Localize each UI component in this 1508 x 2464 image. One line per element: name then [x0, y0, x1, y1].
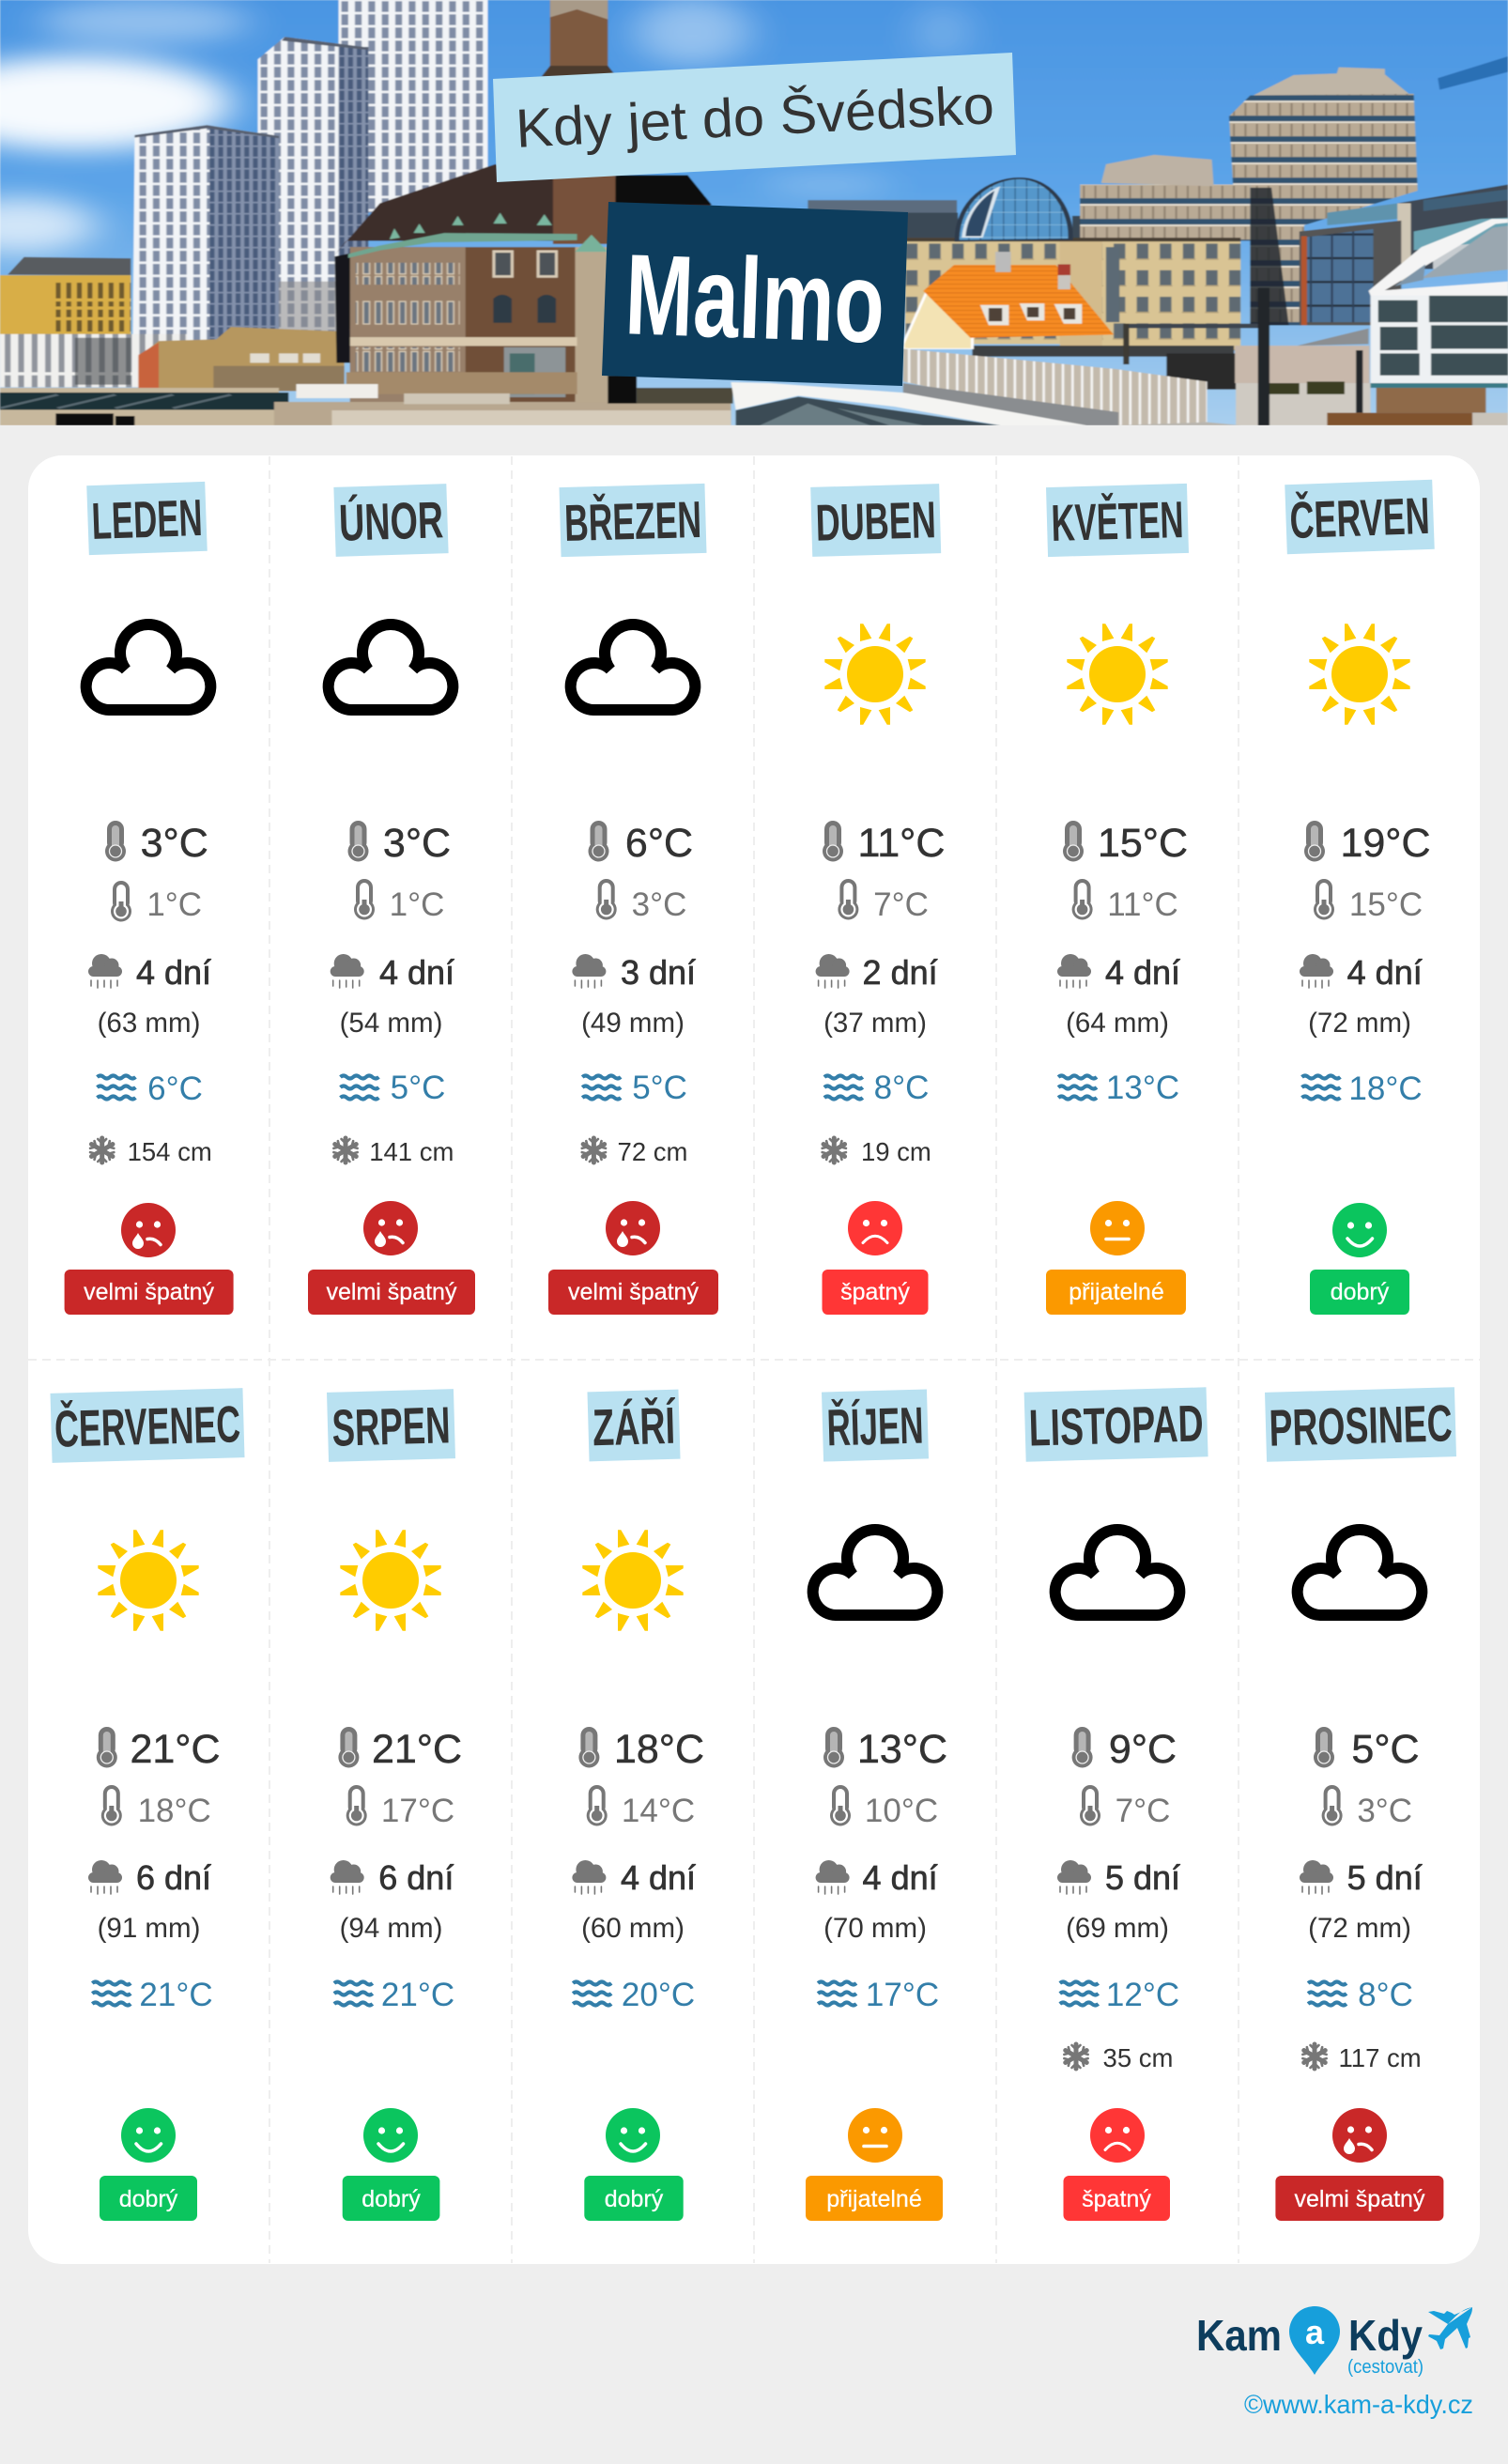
min temperature: 14°C [622, 1793, 695, 1829]
month label: Březen: BŘEZEN [563, 490, 702, 552]
rainy days [1300, 1858, 1423, 1897]
sea temperature: 21°C [381, 1977, 454, 2013]
sea temperature [1301, 1070, 1423, 1107]
month column: Březen [548, 484, 718, 1315]
month label: Srpen [327, 1389, 455, 1462]
max temperature [1072, 1727, 1177, 1772]
rainy days: 4 dní [379, 953, 454, 992]
precipitation: (37 mm) [823, 1008, 927, 1039]
back right buildings [808, 200, 957, 240]
yellow building [8, 257, 131, 275]
month label: Říjen: ŘÍJEN [826, 1396, 924, 1456]
rating badge [65, 1270, 234, 1315]
logo: Kam a Kdy: Kam [1196, 2311, 1282, 2360]
snow depth: 117 cm [1339, 2043, 1422, 2072]
rating badge [1063, 2176, 1170, 2221]
rating badge: dobrý [605, 2186, 664, 2212]
icon: cloud [1298, 1530, 1422, 1615]
snow depth [1063, 2043, 1173, 2072]
max temperature: 21°C [372, 1727, 462, 1772]
rainy days [1300, 953, 1423, 992]
max temperature: 11°C [858, 821, 945, 866]
min temperature: 15°C [1349, 886, 1423, 923]
sea temperature [1308, 1977, 1413, 2013]
rating badge: velmi špatný [327, 1279, 457, 1305]
icon: cloud [329, 624, 453, 710]
railing and footbridge [903, 348, 1207, 425]
snow depth: 35 cm [1103, 2043, 1173, 2072]
snow depth [1301, 2043, 1422, 2072]
website credit: ©www.kam-a-kdy.cz [1244, 2390, 1473, 2419]
sea temperature [582, 1070, 687, 1106]
min temperature [838, 879, 929, 923]
quay and bridge left [0, 388, 279, 425]
rating badge: špatný [840, 1279, 910, 1305]
icon: rating face [121, 1203, 176, 1257]
min temperature: 11°C [1107, 886, 1178, 923]
month label: Prosinec [1265, 1387, 1456, 1462]
precipitation: (94 mm) [340, 1913, 442, 1944]
precipitation: (49 mm) [581, 1008, 685, 1039]
icon: rating face [363, 1201, 418, 1255]
min temperature [1080, 1785, 1170, 1829]
precipitation: (64 mm) [1066, 1008, 1169, 1039]
precipitation: (91 mm) [98, 1913, 200, 1944]
month label: Leden: LEDEN [90, 488, 204, 550]
icon: rating face [1332, 2108, 1387, 2163]
rainy days: 6 dní [136, 1858, 211, 1897]
max temperature [588, 821, 693, 866]
icon: rating face [606, 1201, 660, 1255]
rainy days [331, 1858, 454, 1897]
logo: Kam a Kdy [1196, 2306, 1472, 2378]
rainy days: 4 dní [1347, 953, 1423, 992]
month label: Září [587, 1390, 681, 1461]
rating badge [823, 1270, 928, 1315]
tan-roof house [138, 327, 345, 391]
brick building [334, 164, 712, 254]
sea temperature [340, 1070, 445, 1106]
month label: Květen: KVĚTEN [1051, 490, 1184, 552]
rainy days [572, 1858, 696, 1897]
rainy days: 5 dní [1347, 1858, 1423, 1897]
month label: Únor: ÚNOR [338, 490, 444, 552]
max temperature: 9°C [1109, 1727, 1177, 1772]
precipitation: (60 mm) [581, 1913, 685, 1944]
month label: Červen: ČERVEN [1288, 486, 1431, 549]
precipitation: (70 mm) [823, 1913, 927, 1944]
sea temperature: 18°C [1348, 1070, 1423, 1107]
sea temperature [824, 1070, 929, 1106]
sea temperature [1060, 1977, 1179, 2013]
rating badge: dobrý [119, 2186, 178, 2212]
icon: rating face [121, 2108, 176, 2163]
rating badge [1310, 1270, 1409, 1315]
min temperature: 7°C [1116, 1793, 1170, 1829]
city banner: Malmo: Malmo [623, 230, 886, 367]
rainy days [331, 953, 454, 992]
month column: Únor [308, 484, 475, 1315]
sea temperature [1058, 1070, 1179, 1106]
month column: Září [572, 1390, 704, 2221]
rainy days: 5 dní [1105, 1858, 1180, 1897]
min temperature [346, 1785, 454, 1829]
rainy days: 4 dní [136, 953, 211, 992]
min temperature [111, 881, 202, 923]
month label: Červenec: ČERVENEC [54, 1394, 241, 1458]
icon: sun [98, 1530, 199, 1631]
sea temperature [334, 1977, 454, 2013]
icon: map pin [1289, 2306, 1340, 2375]
clock tower [550, 0, 608, 68]
sea temperature: 6°C [147, 1070, 203, 1107]
month label: Únor [333, 484, 449, 557]
city banner: Malmo [602, 202, 908, 386]
month label: Duben [810, 484, 941, 557]
month label: Červenec [51, 1388, 244, 1463]
icon: sun [340, 1530, 441, 1631]
rating badge: dobrý [1331, 1279, 1390, 1305]
rainy days [88, 1858, 211, 1897]
rating badge [1046, 1270, 1186, 1315]
towers [339, 0, 487, 212]
month column: Leden [65, 482, 234, 1315]
sea temperature [92, 1977, 213, 2013]
month column: Červen [1285, 480, 1435, 1315]
min temperature [596, 879, 686, 923]
rating badge [343, 2176, 439, 2221]
rainy days [88, 953, 211, 992]
snow depth: 19 cm [861, 1137, 931, 1166]
icon: map pin: a [1305, 2313, 1325, 2351]
max temperature: 21°C [130, 1727, 221, 1772]
min temperature: 1°C [390, 886, 444, 923]
min temperature: 3°C [632, 886, 686, 923]
sea temperature: 21°C [139, 1977, 213, 2013]
icon: rating face [1090, 1201, 1145, 1255]
month label: Srpen: SRPEN [331, 1395, 451, 1457]
precipitation: (63 mm) [98, 1008, 200, 1039]
max temperature: 3°C [141, 821, 208, 866]
rainy days: 4 dní [863, 1858, 938, 1897]
snow depth [332, 1137, 454, 1166]
rainy days: 3 dní [621, 953, 696, 992]
rainy days [572, 953, 696, 992]
rating badge: přijatelné [826, 2186, 922, 2212]
rating badge: velmi špatný [1295, 2186, 1425, 2212]
icon: cloud [571, 624, 695, 710]
min temperature [354, 879, 444, 923]
max temperature: 18°C [614, 1727, 704, 1772]
month column: Listopad [1024, 1387, 1208, 2221]
max temperature [105, 821, 208, 866]
rating badge [1275, 2176, 1443, 2221]
snow depth [822, 1137, 931, 1166]
max temperature [1314, 1727, 1420, 1772]
lower right complex [973, 346, 1234, 357]
logo: Kam a Kdy: Kdy [1348, 2311, 1423, 2360]
min temperature [830, 1785, 938, 1829]
sea temperature: 13°C [1106, 1070, 1179, 1106]
month label: Duben: DUBEN [815, 490, 937, 552]
glass buildings [1397, 185, 1508, 269]
snow depth: 154 cm [128, 1137, 212, 1166]
rainy days [1057, 953, 1180, 992]
max temperature: 19°C [1340, 821, 1431, 866]
rating badge: dobrý [362, 2186, 421, 2212]
rainy days [1057, 1858, 1180, 1897]
rating badge [584, 2176, 684, 2221]
rating badge [806, 2176, 943, 2221]
rainy days [816, 1858, 938, 1897]
month label: Březen [559, 484, 707, 557]
max temperature: 3°C [383, 821, 451, 866]
logo: Kam a Kdy: (cestovat) [1347, 2357, 1423, 2378]
month column: Červenec [51, 1388, 244, 2221]
icon: rating face [363, 2108, 418, 2163]
rating badge [308, 1270, 475, 1315]
min temperature: 3°C [1357, 1793, 1412, 1829]
month column: Květen [1046, 484, 1189, 1315]
month label: Listopad: LISTOPAD [1028, 1394, 1204, 1457]
icon: cloud [86, 624, 210, 710]
icon: rating face [848, 2108, 902, 2163]
month label: Říjen [822, 1389, 929, 1462]
rainy days: 6 dní [378, 1858, 454, 1897]
sea temperature [818, 1977, 939, 2013]
icon: sun [1309, 624, 1410, 725]
low white building [0, 334, 188, 387]
precipitation: (72 mm) [1308, 1008, 1411, 1039]
icon: rating face [1332, 1203, 1387, 1257]
sea temperature [98, 1070, 203, 1107]
panel: monthly climate table [28, 455, 1480, 2264]
snow depth: 72 cm [618, 1137, 687, 1166]
max temperature [347, 821, 451, 866]
sea temperature: 17°C [866, 1977, 939, 2013]
sea temperature: 12°C [1106, 1977, 1179, 2013]
pavilion [1371, 291, 1508, 388]
month column: Prosinec [1265, 1387, 1456, 2221]
min temperature [101, 1785, 211, 1829]
min temperature [1322, 1785, 1412, 1829]
min temperature [587, 1785, 695, 1829]
max temperature: 5°C [1351, 1727, 1420, 1772]
rainy days: 4 dní [621, 1858, 696, 1897]
sea temperature [573, 1977, 695, 2013]
precipitation: (72 mm) [1308, 1913, 1411, 1944]
snow depth: 141 cm [369, 1137, 454, 1166]
header photo: Malmö skyline [0, 0, 1508, 425]
rating badge: přijatelné [1069, 1279, 1164, 1305]
max temperature: 15°C [1098, 821, 1188, 866]
min temperature: 1°C [146, 886, 202, 923]
icon: rating face [606, 2108, 660, 2163]
min temperature: 17°C [381, 1793, 454, 1829]
concrete tower [1251, 68, 1409, 97]
sea temperature: 5°C [632, 1070, 687, 1106]
icon: cloud [813, 1530, 937, 1615]
title banner: Kdy jet do Švédsko [493, 53, 1016, 182]
snow depth [89, 1137, 212, 1166]
min temperature: 10°C [865, 1793, 938, 1829]
icon: sun [824, 624, 926, 725]
precipitation: (69 mm) [1066, 1913, 1169, 1944]
precipitation: (54 mm) [340, 1008, 442, 1039]
min temperature: 7°C [873, 886, 929, 923]
month column: Říjen [806, 1389, 947, 2221]
rainy days [816, 953, 938, 992]
sea temperature: 8°C [874, 1070, 929, 1106]
max temperature: 13°C [857, 1727, 947, 1772]
sea temperature: 5°C [391, 1070, 445, 1106]
rainy days: 2 dní [863, 953, 938, 992]
title banner: Kdy jet do Švédsko: Kdy jet do Švédsko [515, 74, 995, 160]
rating badge: špatný [1082, 2186, 1151, 2212]
icon: rating face [1090, 2108, 1145, 2163]
min temperature [1072, 879, 1178, 923]
month column: Srpen [327, 1389, 462, 2221]
rating badge [100, 2176, 197, 2221]
month column: Duben [810, 484, 945, 1315]
month label: Listopad [1024, 1387, 1208, 1462]
max temperature: 6°C [625, 821, 693, 866]
month label: Září: ZÁŘÍ [592, 1396, 677, 1456]
rating badge: velmi špatný [568, 1279, 699, 1305]
month label: Leden [86, 482, 208, 555]
icon: sun [582, 1530, 684, 1631]
icon: sun [1067, 624, 1168, 725]
min temperature [1314, 879, 1423, 923]
sea temperature: 8°C [1358, 1977, 1413, 2013]
rainy days: 4 dní [1105, 953, 1180, 992]
month label: Květen [1046, 484, 1189, 557]
orange-roof house [903, 291, 973, 348]
rating badge [548, 1270, 718, 1315]
snow depth [581, 1137, 687, 1166]
min temperature: 18°C [138, 1793, 211, 1829]
month label: Červen [1285, 480, 1435, 554]
sea temperature: 20°C [622, 1977, 695, 2013]
icon: rating face [848, 1201, 902, 1255]
rating badge: velmi špatný [84, 1279, 215, 1305]
icon: cloud [1055, 1530, 1179, 1615]
icon: plane [1428, 2307, 1472, 2349]
